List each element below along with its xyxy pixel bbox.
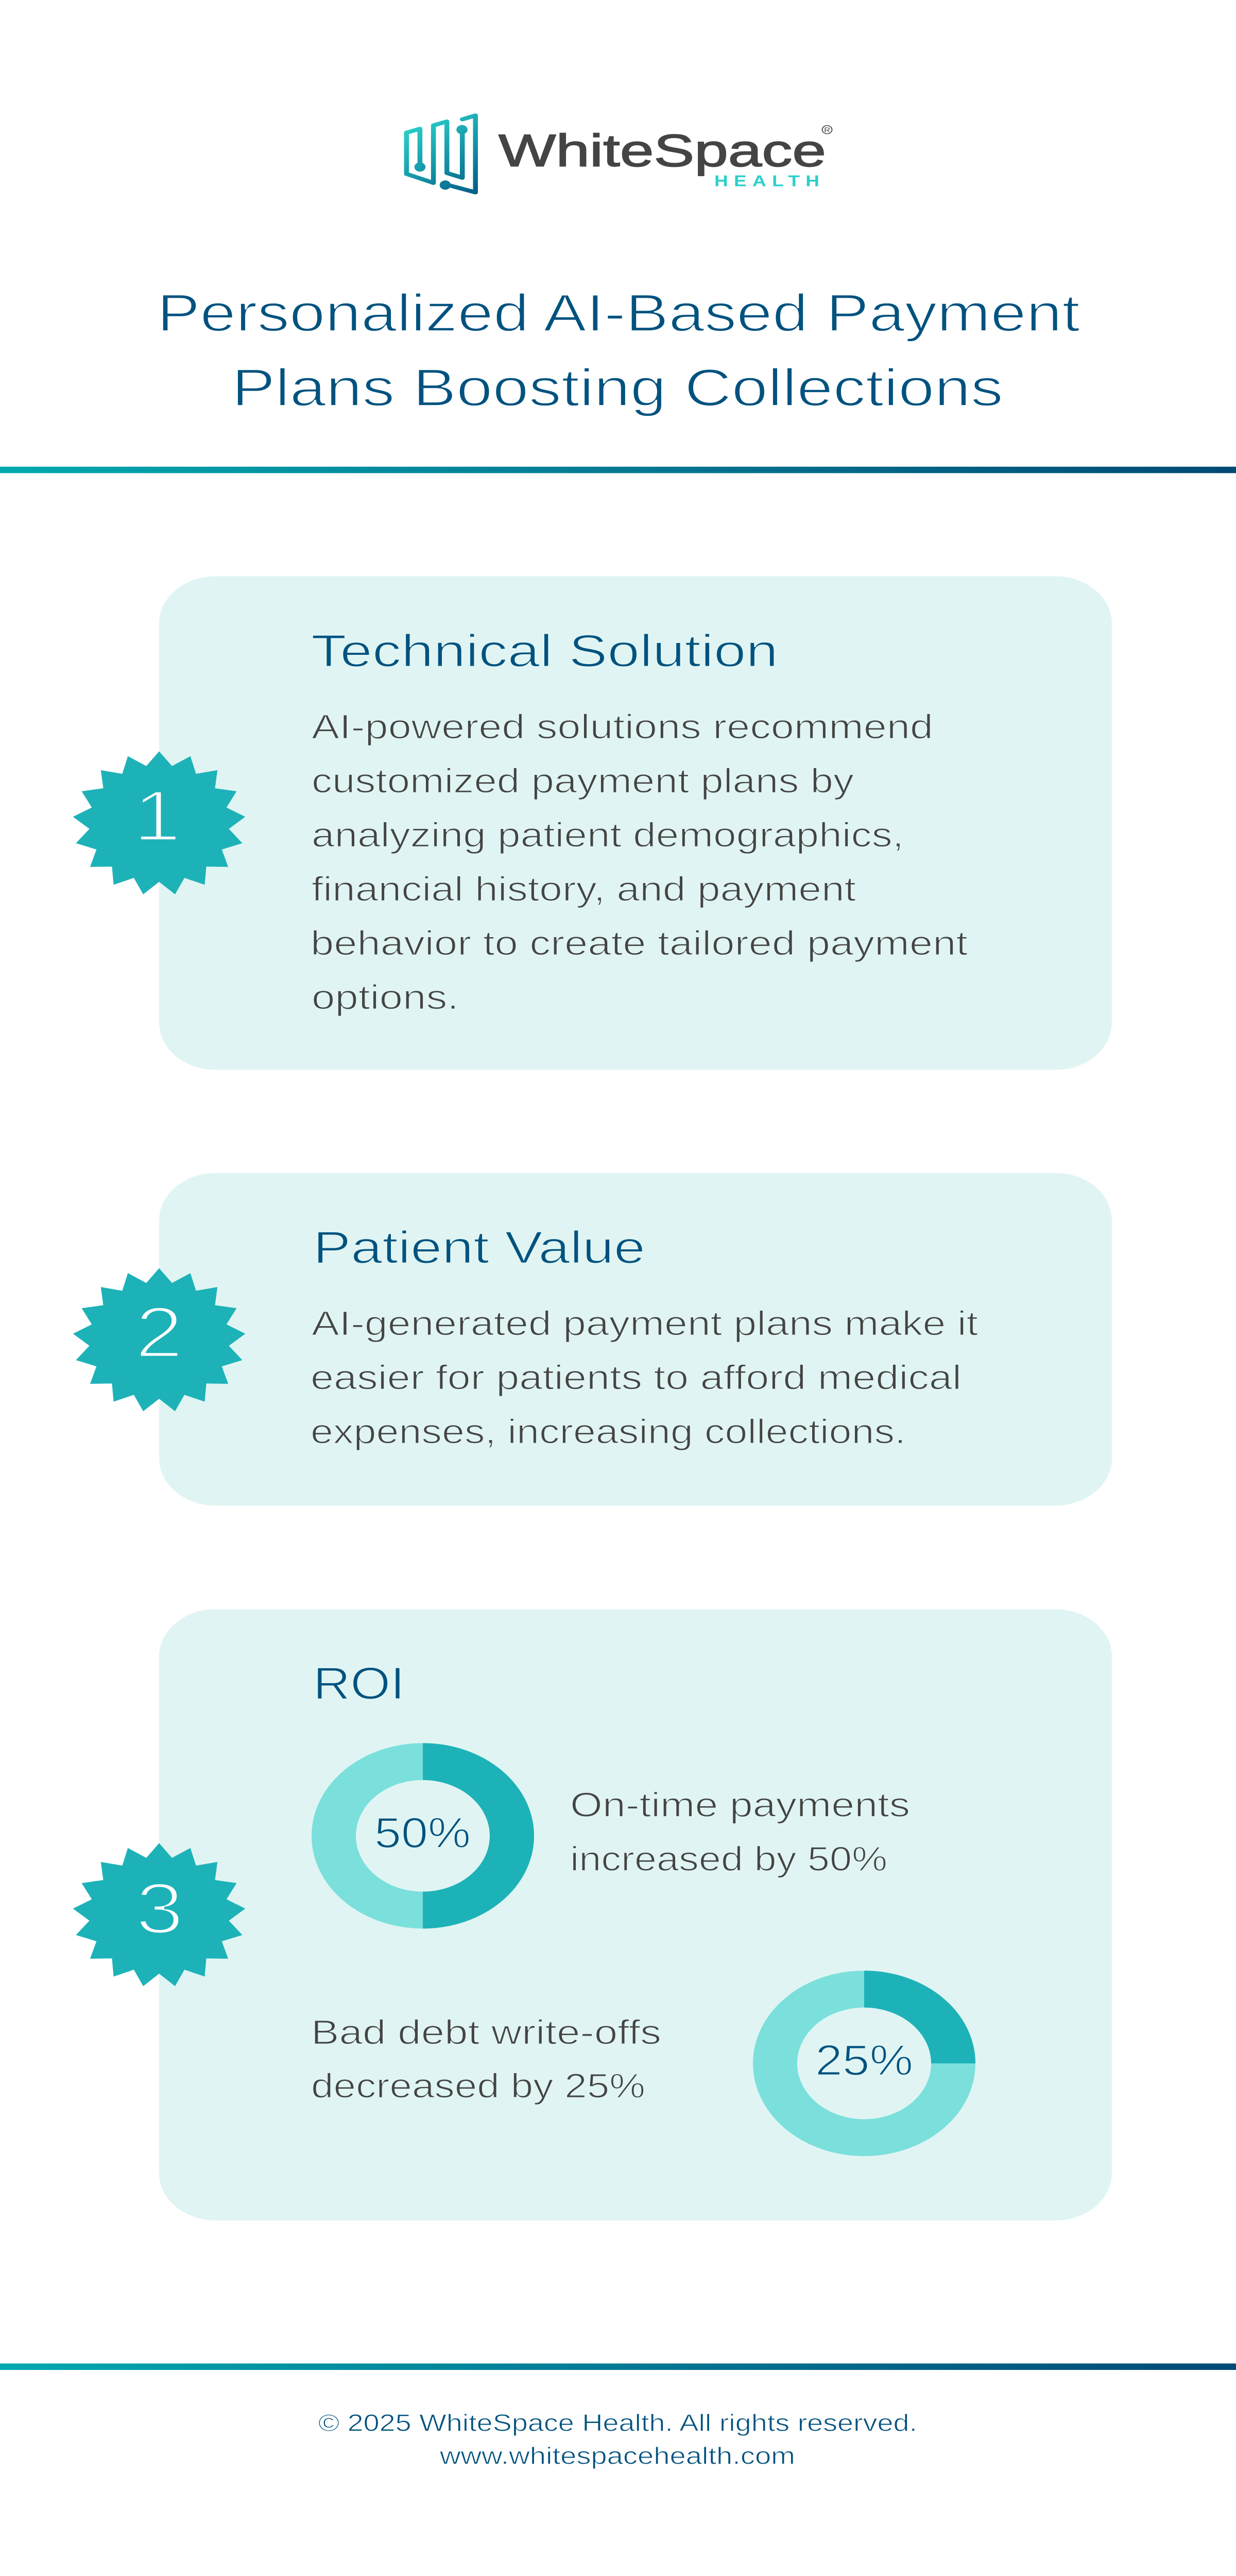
text block: bad debt write-offs (311, 2013, 661, 2105)
heading: patient value: Patient Value (313, 1222, 645, 1273)
panel: patient value (73, 1173, 1112, 1505)
text block: technical solution (311, 707, 968, 1016)
title (157, 283, 1080, 417)
text block: patient value (311, 1304, 978, 1451)
text block: patient value: expenses, increasing collections. (311, 1412, 906, 1451)
text block: on-time payments (570, 1785, 910, 1878)
donut chart: 25 percent: 25% (815, 2036, 913, 2084)
panel: ROI (73, 1609, 1112, 2221)
top gradient divider (0, 467, 1236, 473)
donut chart: 50 percent (334, 1743, 534, 1928)
panel: technical solution (73, 576, 1112, 1070)
text block: bad debt write-offs: decreased by 25% (311, 2066, 645, 2105)
text block: technical solution: analyzing patient demographics, (312, 816, 904, 854)
text block: patient value: AI-generated payment plans make it (312, 1304, 978, 1343)
registered mark (822, 126, 832, 134)
heading: ROI: ROI (313, 1658, 405, 1709)
text block: patient value: easier for patients to afford medical (311, 1358, 962, 1397)
donut chart: 25 percent (775, 1971, 975, 2138)
badge: number 3: 3 (135, 1868, 184, 1948)
footer (318, 2409, 917, 2469)
text block: technical solution: customized payment plans by (312, 761, 854, 800)
icon: logo circuit mark (406, 115, 475, 192)
registered mark: R (824, 127, 830, 134)
title: Plans Boosting Collections (232, 358, 1003, 417)
text block: bad debt write-offs: Bad debt write-offs (311, 2013, 661, 2052)
badge: number 1: 1 (133, 775, 181, 856)
logo wordmark: WhiteSpace (499, 125, 826, 176)
text block: technical solution: options. (312, 978, 459, 1016)
logo: WhiteSpace Health (406, 115, 832, 192)
badge: number 2: 2 (135, 1292, 183, 1372)
title: Personalized AI-Based Payment (157, 283, 1080, 342)
badge: number 3 (73, 1843, 245, 1986)
logo subtext: HEALTH (714, 173, 819, 190)
text block: technical solution: financial history, and payment (312, 870, 856, 908)
heading: technical solution: Technical Solution (311, 625, 778, 676)
badge: number 1 (73, 751, 245, 894)
badge: number 2 (73, 1268, 245, 1411)
text block: on-time payments: increased by 50% (570, 1839, 887, 1878)
footer: © 2025 WhiteSpace Health. All rights reserved. (318, 2409, 917, 2436)
text block: on-time payments: On-time payments (570, 1785, 910, 1824)
text block: technical solution: behavior to create tailored payment (311, 924, 968, 962)
donut chart: 50 percent: 50% (374, 1809, 471, 1857)
text block: technical solution: AI-powered solutions recommend (312, 707, 933, 746)
footer: www.whitespacehealth.com (439, 2442, 795, 2469)
bottom gradient divider (0, 2364, 1236, 2370)
